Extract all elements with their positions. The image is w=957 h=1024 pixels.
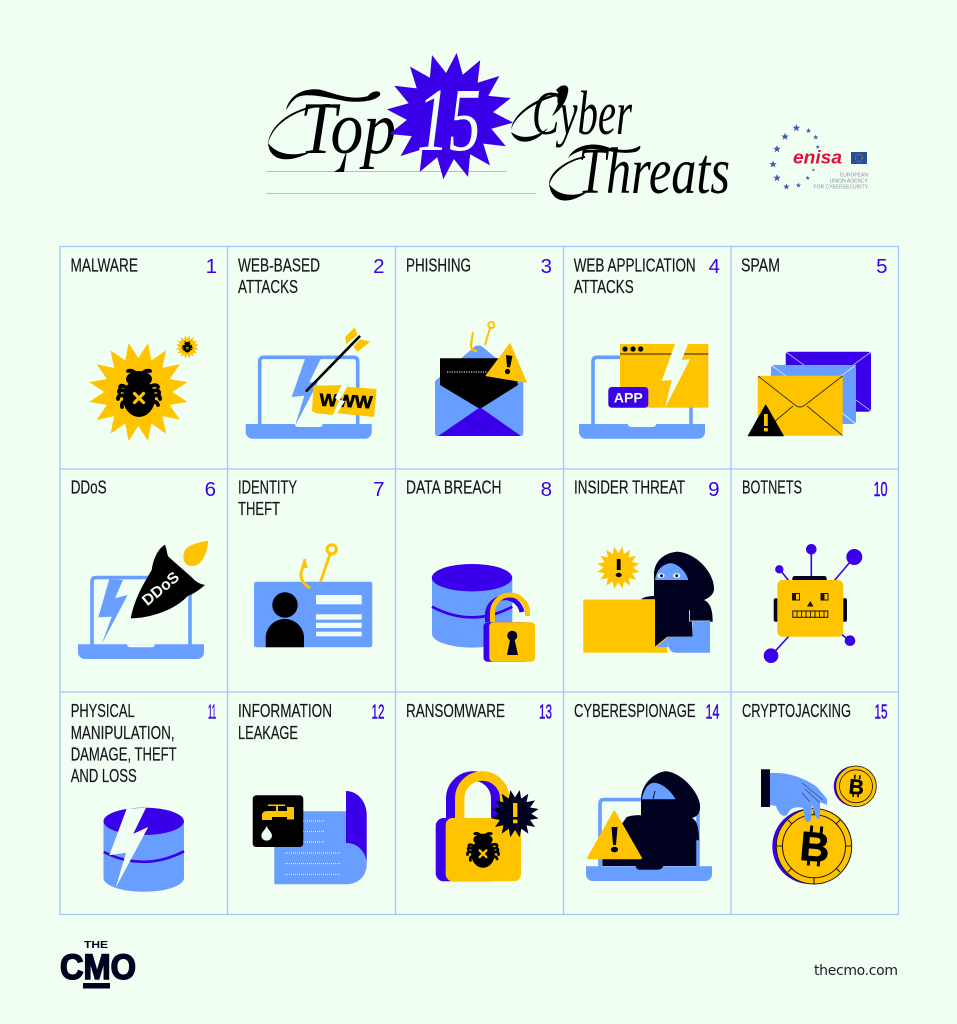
- icon: laptop hit by rocket: [78, 541, 208, 659]
- title underlines: [266, 172, 536, 194]
- number: 12: [372, 700, 384, 724]
- word CMO: CMO: [60, 948, 136, 987]
- heading: WEB-BASED: [238, 254, 320, 276]
- heading: INSIDER THREAT: [574, 476, 685, 498]
- website: thecmo.com: [814, 963, 898, 979]
- panel: cryptojacking: [742, 700, 888, 884]
- heading: ATTACKS: [238, 276, 298, 297]
- badge number 15: 15: [417, 71, 481, 170]
- heading: ATTACKS: [574, 276, 634, 297]
- heading: BOTNETS: [742, 476, 802, 498]
- heading: [238, 476, 297, 519]
- heading: [238, 254, 320, 297]
- heading: [574, 254, 696, 297]
- heading: AND LOSS: [71, 765, 137, 786]
- number: 9: [708, 478, 720, 501]
- agency name: UNION AGENCY: [830, 178, 869, 184]
- panel: ransomware: [406, 700, 552, 881]
- panel: phishing: [406, 254, 552, 436]
- title word: Top: Top: [300, 88, 396, 170]
- panel: web application attacks: [574, 254, 720, 439]
- heading: SPAM: [741, 254, 780, 276]
- icon: hand with bitcoins: B: [798, 823, 832, 871]
- heading: PHYSICAL: [71, 700, 135, 721]
- word THE: THE: [84, 940, 108, 951]
- number: 6: [205, 478, 216, 501]
- icon: hooded figure at yellow laptop: [583, 542, 714, 653]
- heading: [238, 700, 332, 743]
- panel: ddos: [71, 476, 216, 659]
- icon: laptop hit by rocket: DDoS: [139, 569, 183, 609]
- logo: The CMO: [60, 940, 136, 988]
- icon: laptop with arrow and www: [246, 327, 377, 439]
- panel: spam: [741, 254, 888, 436]
- icon: laptop with arrow and www: WWW: [319, 390, 373, 412]
- heading: [71, 700, 177, 786]
- heading: DAMAGE, THEFT: [71, 744, 177, 764]
- icon: hand with bitcoins: B: [848, 775, 865, 800]
- icon: database with padlock: [432, 564, 535, 662]
- number: 1: [206, 255, 217, 278]
- panel: web-based attacks: [238, 254, 384, 439]
- icon: envelope with hook and warning: [435, 322, 526, 436]
- heading: DDoS: [71, 476, 107, 498]
- agency name: EUROPEAN: [840, 172, 868, 178]
- icon: hand with bitcoins: [761, 766, 876, 884]
- panel: identity theft: [238, 476, 384, 647]
- icon: stacked envelopes: [748, 352, 871, 436]
- heading: INFORMATION: [238, 700, 332, 721]
- panel: data breach: [406, 476, 552, 662]
- heading: DATA BREACH: [406, 476, 502, 498]
- ring of EU stars: [769, 124, 820, 189]
- number: 2: [373, 255, 384, 278]
- icon: hooded figure with warning: [586, 771, 712, 881]
- number: 7: [373, 478, 384, 501]
- heading: THEFT: [238, 498, 280, 519]
- number: 15: [874, 700, 888, 724]
- swash on T of Threats: [549, 144, 640, 201]
- title word: Cyber: Cyber: [532, 80, 633, 148]
- icon: laptop with app window: [579, 344, 708, 439]
- number: 13: [539, 700, 552, 724]
- number: 5: [876, 255, 888, 278]
- heading: WEB APPLICATION: [574, 254, 696, 276]
- icon: robot with nodes: [764, 544, 862, 663]
- panel: botnets: [742, 476, 888, 663]
- heading: RANSOMWARE: [406, 700, 505, 721]
- icon: bug on burst: [80, 333, 201, 451]
- number: 3: [541, 255, 552, 278]
- EU flag: [851, 152, 867, 164]
- swash on T of Top: [268, 89, 380, 172]
- heading: MANIPULATION,: [71, 722, 175, 743]
- heading: MALWARE: [70, 254, 138, 276]
- panel: malware: [70, 254, 217, 451]
- swash on C of Cyber: [511, 85, 568, 142]
- heading: IDENTITY: [238, 476, 297, 498]
- number: 4: [709, 255, 720, 278]
- heading: CRYPTOJACKING: [742, 700, 851, 721]
- enisa wordmark: enisa: [793, 148, 842, 168]
- grid lines: [60, 246, 898, 915]
- title word: Threats: Threats: [578, 135, 730, 208]
- icon: padlock with bug: [436, 776, 543, 881]
- title: [266, 46, 730, 208]
- text: 11: [208, 700, 216, 724]
- number: 10: [874, 478, 888, 501]
- agency name: FOR CYBERSECURITY: [814, 184, 869, 190]
- logo: enisa: [769, 124, 869, 190]
- panel: physical manipulation: [71, 700, 216, 892]
- number: 8: [541, 478, 552, 501]
- icon: scroll and leaking tap: [253, 791, 367, 884]
- panel: insider threat: [574, 476, 720, 653]
- panel: cyberespionage: [574, 700, 720, 881]
- icon: id card with hook: [254, 545, 372, 647]
- heading: CYBERESPIONAGE: [574, 700, 696, 721]
- underbar: [83, 983, 110, 988]
- number: 14: [706, 700, 720, 724]
- heading: PHISHING: [406, 254, 471, 276]
- icon: laptop with app window: APP: [614, 390, 643, 406]
- icon: database with bolt: [104, 808, 184, 892]
- badge: blue burst: [380, 46, 520, 186]
- panel: information leakage: [238, 700, 384, 884]
- heading: LEAKAGE: [238, 722, 298, 743]
